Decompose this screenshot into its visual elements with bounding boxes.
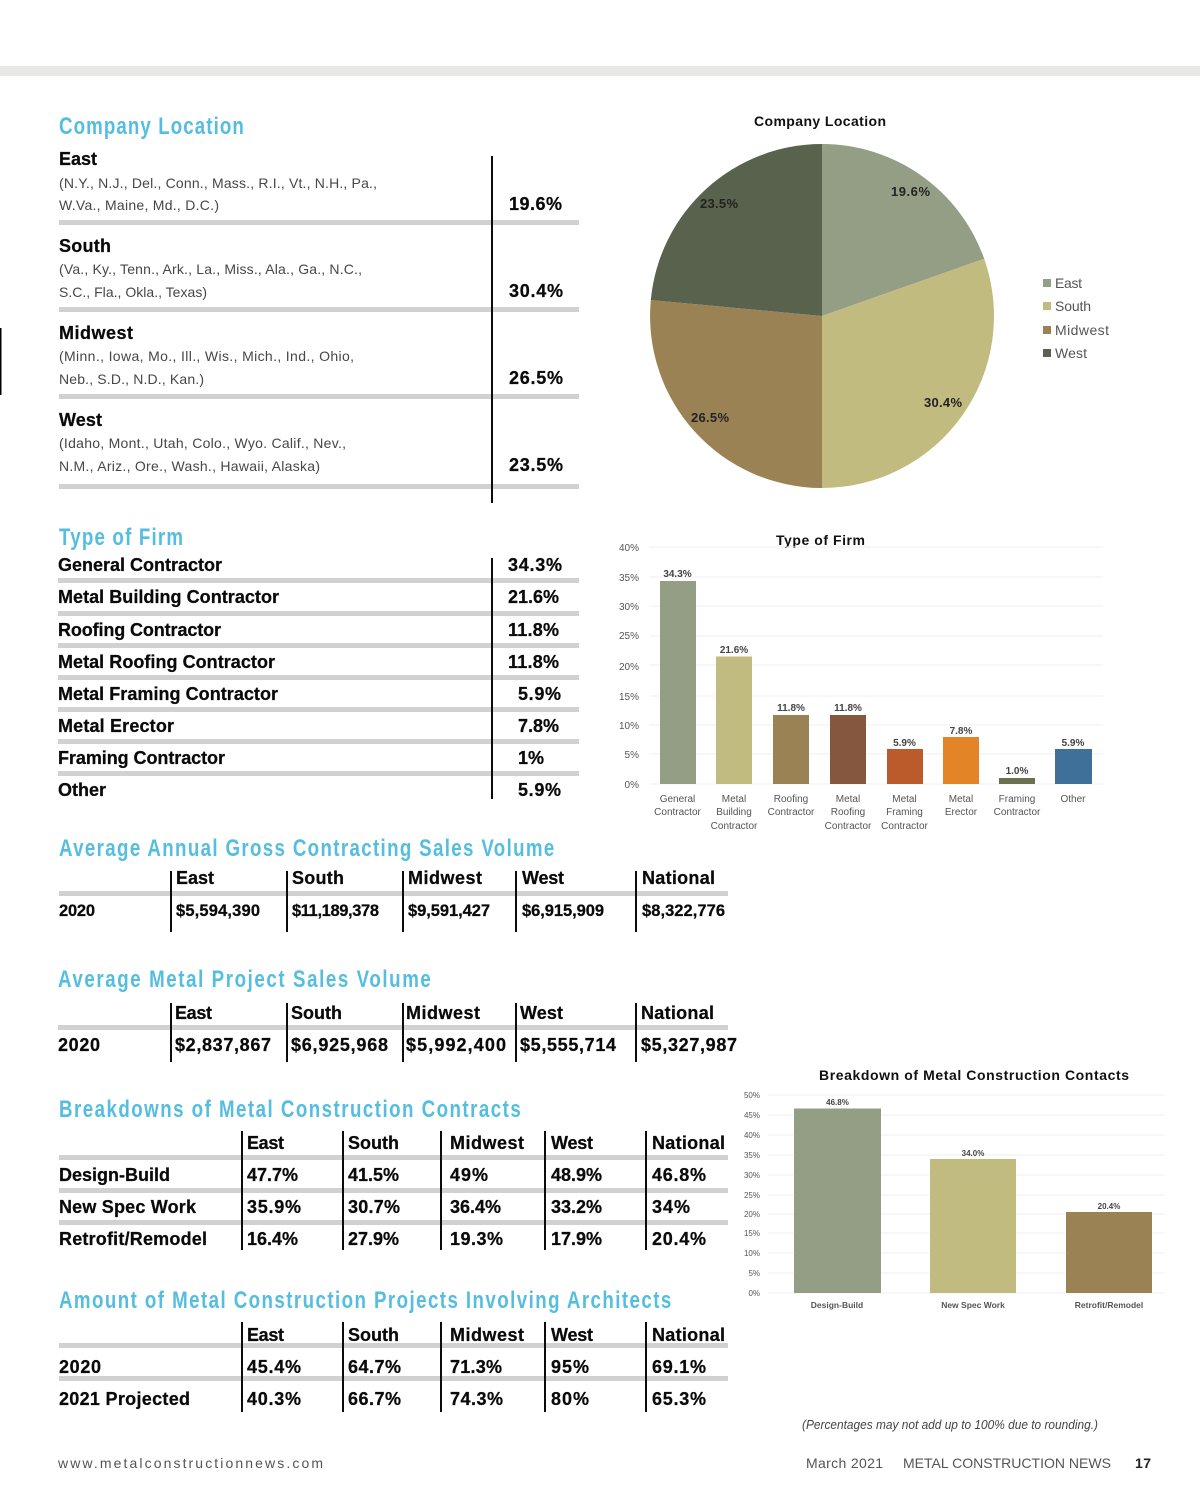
row: midwest: (Minn., Iowa, Mo., Ill., Wis., Mich., Ind., Ohio, [59, 348, 354, 364]
row: midwest: Midwest [59, 323, 133, 343]
panel: average metal project sales volume [58, 966, 737, 1062]
panel: breakdowns of metal construction contracts: 34% [652, 1197, 690, 1217]
panel: breakdowns of metal construction contracts: 36.4% [450, 1197, 501, 1217]
y axis labels: 0% [748, 1289, 760, 1298]
panel: projects involving architects: West [551, 1325, 593, 1345]
row: midwest [59, 323, 563, 388]
bars [660, 581, 1092, 784]
panel: projects involving architects: 69.1% [652, 1357, 706, 1377]
panel: type of firm table: 34.3% [508, 555, 562, 575]
y axis labels: 35% [619, 573, 639, 584]
y axis labels: 0% [625, 780, 639, 791]
panel: average annual gross contracting sales volume: $6,915,909 [522, 902, 604, 920]
panel: type of firm table: 11.8% [508, 620, 559, 640]
y axis labels: 40% [744, 1131, 760, 1140]
y axis labels: 35% [744, 1151, 760, 1160]
panel: breakdowns of metal construction contracts: South [348, 1133, 399, 1153]
panel: breakdowns of metal construction contracts: East [247, 1133, 284, 1153]
bar chart: type of firm [619, 532, 1103, 832]
category labels: Contractor [768, 807, 815, 818]
panel: average metal project sales volume: South [291, 1003, 342, 1023]
slice labels [691, 184, 962, 425]
heading: metal project sales: Average Metal Project Sales Volume [58, 966, 431, 993]
panel: average metal project sales volume: $5,327,987 [641, 1035, 737, 1055]
panel: average annual gross contracting sales volume: $11,189,378 [292, 902, 379, 920]
panel: breakdowns of metal construction contracts: 41.5% [348, 1165, 399, 1185]
heading: type of firm: Type of Firm [59, 524, 183, 551]
panel: projects involving architects: South [348, 1325, 399, 1345]
panel: average metal project sales volume: East [175, 1003, 212, 1023]
panel: breakdowns of metal construction contracts: Design-Build [59, 1165, 170, 1185]
y axis labels: 5% [625, 750, 639, 761]
row: west: N.M., Ariz., Ore., Wash., Hawaii, Alaska) [59, 458, 320, 474]
panel: average annual gross contracting sales volume: 2020 [59, 902, 95, 920]
chart title: Breakdown of Metal Construction Contacts [819, 1067, 1129, 1083]
panel: average annual gross contracting sales volume [59, 835, 728, 932]
y axis labels: 25% [619, 631, 639, 642]
panel: average annual gross contracting sales volume: National [642, 868, 715, 888]
panel: projects involving architects: 71.3% [450, 1357, 502, 1377]
panel: breakdowns of metal construction contracts: National [652, 1133, 725, 1153]
panel: projects involving architects: 2020 [59, 1357, 101, 1377]
category labels: Retrofit/Remodel [1075, 1300, 1143, 1310]
category labels: Metal [892, 794, 917, 805]
y axis labels: 20% [619, 662, 639, 673]
row: south: 30.4% [509, 281, 563, 301]
panel: average annual gross contracting sales volume: $5,594,390 [176, 902, 260, 920]
panel: breakdowns of metal construction contracts: 47.7% [247, 1165, 298, 1185]
panel: type of firm table [58, 524, 579, 800]
panel: breakdowns of metal construction contracts: 20.4% [652, 1229, 706, 1249]
panel: type of firm table: General Contractor [58, 555, 222, 575]
category labels [654, 794, 1086, 832]
legend: East [1055, 275, 1082, 291]
y axis labels: 30% [619, 602, 639, 613]
panel: projects involving architects: 2021 Projected [59, 1389, 190, 1409]
panel: projects involving architects: 64.7% [348, 1357, 401, 1377]
y axis labels: 15% [619, 692, 639, 703]
panel: breakdowns of metal construction contracts: 48.9% [551, 1165, 602, 1185]
heading: breakdowns: Breakdowns of Metal Construction Contracts [59, 1096, 521, 1123]
panel: breakdowns of metal construction contracts [59, 1096, 728, 1250]
y axis labels [744, 1091, 760, 1298]
footnote: (Percentages may not add up to 100% due to rounding.) [802, 1417, 1098, 1432]
value labels: 46.8% [826, 1098, 849, 1107]
slice labels: 26.5% [691, 410, 729, 425]
category labels: Contractor [994, 807, 1041, 818]
category labels: Contractor [654, 807, 702, 818]
panel: average annual gross contracting sales volume: South [292, 868, 344, 888]
footer [57, 1455, 1151, 1471]
row: east: 19.6% [509, 194, 562, 214]
panel: breakdowns of metal construction contracts: 17.9% [551, 1229, 602, 1249]
value labels: 11.8% [777, 703, 805, 714]
panel: type of firm table: Metal Roofing Contractor [58, 652, 275, 672]
value labels: 21.6% [720, 645, 748, 656]
category labels: Roofing [831, 807, 865, 818]
category labels: Erector [945, 807, 978, 818]
category labels: Framing [999, 794, 1035, 805]
chart title: Type of Firm [776, 532, 865, 548]
panel: breakdowns of metal construction contracts: 16.4% [247, 1229, 298, 1249]
panel: type of firm table: Metal Framing Contractor [58, 684, 278, 704]
category labels: Metal [836, 794, 860, 805]
category labels: Design-Build [811, 1300, 863, 1310]
heading: company location: Company Location [59, 113, 244, 140]
value labels: 1.0% [1006, 766, 1029, 777]
panel: breakdowns of metal construction contracts: 19.3% [450, 1229, 503, 1249]
row: east: East [59, 149, 97, 169]
value labels: 34.0% [962, 1149, 984, 1158]
panel: projects involving architects: 45.4% [247, 1357, 301, 1377]
value labels: 5.9% [1062, 738, 1085, 749]
value labels: 34.3% [663, 569, 692, 580]
value labels [826, 1098, 1120, 1211]
legend: Midwest [1055, 322, 1109, 338]
category labels: Framing [886, 807, 923, 818]
y axis labels: 10% [744, 1249, 760, 1258]
row: midwest: Neb., S.D., N.D., Kan.) [59, 371, 204, 387]
y axis labels: 5% [748, 1269, 760, 1278]
panel: average annual gross contracting sales volume: West [522, 868, 564, 888]
y axis labels: 25% [744, 1191, 760, 1200]
heading: architects: Amount of Metal Construction Projects Involving Architects [59, 1287, 671, 1314]
panel: type of firm table: Roofing Contractor [58, 620, 221, 640]
value labels: 20.4% [1098, 1202, 1120, 1211]
panel: breakdowns of metal construction contracts: 35.9% [247, 1197, 301, 1217]
category labels [811, 1300, 1143, 1310]
y axis labels: 30% [744, 1171, 760, 1180]
panel: type of firm table: 1% [518, 748, 544, 768]
panel: projects involving architects: Midwest [450, 1325, 524, 1345]
row: west: West [59, 410, 102, 430]
panel: type of firm table: 21.6% [508, 587, 559, 607]
y axis labels: 15% [744, 1229, 760, 1238]
panel: breakdowns of metal construction contracts: 27.9% [348, 1229, 399, 1249]
panel: projects involving architects: East [247, 1325, 284, 1345]
row: west: (Idaho, Mont., Utah, Colo., Wyo. Calif., Nev., [59, 435, 346, 451]
panel: breakdowns of metal construction contracts: West [551, 1133, 593, 1153]
category labels: Roofing [774, 794, 808, 805]
panel: average metal project sales volume: $5,992,400 [406, 1035, 506, 1055]
value labels [663, 569, 1085, 777]
category labels: Contractor [711, 821, 758, 832]
y axis labels: 50% [744, 1091, 760, 1100]
category labels: Contractor [881, 821, 929, 832]
panel: type of firm table: 5.9% [518, 684, 561, 704]
category labels: Metal [949, 794, 973, 805]
panel: company location table [59, 113, 579, 503]
legend [1043, 275, 1109, 361]
row: east: W.Va., Maine, Md., D.C.) [59, 197, 219, 213]
category labels: Metal [722, 794, 746, 805]
row: south [59, 236, 563, 301]
value labels: 11.8% [834, 703, 862, 714]
row: east [59, 149, 562, 214]
panel: projects involving architects: 40.3% [247, 1389, 301, 1409]
panel: type of firm table: Framing Contractor [58, 748, 225, 768]
panel: average metal project sales volume: $6,925,968 [291, 1035, 388, 1055]
panel: average metal project sales volume: $5,555,714 [520, 1035, 616, 1055]
panel: breakdowns of metal construction contracts: 33.2% [551, 1197, 602, 1217]
panel: breakdowns of metal construction contracts: 30.7% [348, 1197, 400, 1217]
slice labels: 23.5% [700, 196, 738, 211]
panel: projects involving architects: National [652, 1325, 725, 1345]
footer: March 2021 [806, 1455, 883, 1471]
panel: type of firm table: Metal Erector [58, 716, 174, 736]
legend: South [1055, 298, 1091, 314]
row: south: South [59, 236, 111, 256]
panel: average metal project sales volume: National [641, 1003, 714, 1023]
panel: breakdowns of metal construction contracts: 46.8% [652, 1165, 706, 1185]
category labels: Other [1060, 794, 1086, 805]
heading: gross contracting sales: Average Annual Gross Contracting Sales Volume [59, 835, 554, 862]
panel: average annual gross contracting sales volume: Midwest [408, 868, 482, 888]
panel: average annual gross contracting sales volume: $9,591,427 [408, 902, 490, 920]
row: south: S.C., Fla., Okla., Texas) [59, 284, 207, 300]
panel: breakdowns of metal construction contracts: Retrofit/Remodel [59, 1229, 207, 1249]
row: west: 23.5% [509, 455, 563, 475]
panel: projects involving architects: 65.3% [652, 1389, 706, 1409]
panel: type of firm table: Other [58, 780, 106, 800]
pie chart: company location [650, 113, 1109, 488]
category labels: Contractor [825, 821, 872, 832]
legend: West [1055, 345, 1087, 361]
footer: www.metalconstructionnews.com [57, 1455, 323, 1471]
panel: average annual gross contracting sales volume: $8,322,776 [642, 902, 725, 920]
panel: type of firm table: 11.8% [508, 652, 559, 672]
bars [794, 1108, 1152, 1293]
panel: average metal project sales volume: Midwest [406, 1003, 480, 1023]
panel: projects involving architects: 95% [551, 1357, 589, 1377]
row: east: (N.Y., N.J., Del., Conn., Mass., R.I., Vt., N.H., Pa., [59, 175, 377, 191]
panel: breakdowns of metal construction contracts: Midwest [450, 1133, 524, 1153]
y axis labels [619, 543, 639, 791]
row: west [59, 410, 563, 475]
slice labels: 19.6% [891, 184, 930, 199]
panel: projects involving architects: 74.3% [450, 1389, 503, 1409]
slice labels: 30.4% [924, 395, 962, 410]
panel: average annual gross contracting sales volume: East [176, 868, 214, 888]
chart title: Company Location [754, 113, 886, 129]
value labels: 5.9% [893, 738, 916, 749]
panel: type of firm table: 5.9% [518, 780, 561, 800]
footer: METAL CONSTRUCTION NEWS [903, 1455, 1111, 1471]
row: south: (Va., Ky., Tenn., Ark., La., Miss., Ala., Ga., N.C., [59, 261, 362, 277]
panel: breakdowns of metal construction contracts: 49% [450, 1165, 488, 1185]
panel: average metal project sales volume: $2,837,867 [175, 1035, 271, 1055]
value labels: 7.8% [950, 726, 973, 737]
panel: breakdowns of metal construction contracts: New Spec Work [59, 1197, 197, 1217]
y axis labels: 40% [619, 543, 639, 554]
bar chart: breakdown of metal construction contacts [744, 1067, 1165, 1310]
panel: average metal project sales volume: West [520, 1003, 563, 1023]
panel: type of firm table: 7.8% [518, 716, 559, 736]
panel: projects involving architects [59, 1287, 728, 1412]
panel: projects involving architects: 80% [551, 1389, 589, 1409]
category labels: General [660, 794, 695, 805]
panel: average metal project sales volume: 2020 [58, 1035, 100, 1055]
category labels: Building [716, 807, 752, 818]
y axis labels: 20% [744, 1210, 760, 1219]
row: midwest: 26.5% [509, 368, 563, 388]
panel: type of firm table: Metal Building Contractor [58, 587, 279, 607]
y axis labels: 10% [619, 721, 639, 732]
footer: 17 [1135, 1455, 1151, 1471]
y axis labels: 45% [744, 1111, 760, 1120]
category labels: New Spec Work [941, 1300, 1005, 1310]
panel: projects involving architects: 66.7% [348, 1389, 401, 1409]
